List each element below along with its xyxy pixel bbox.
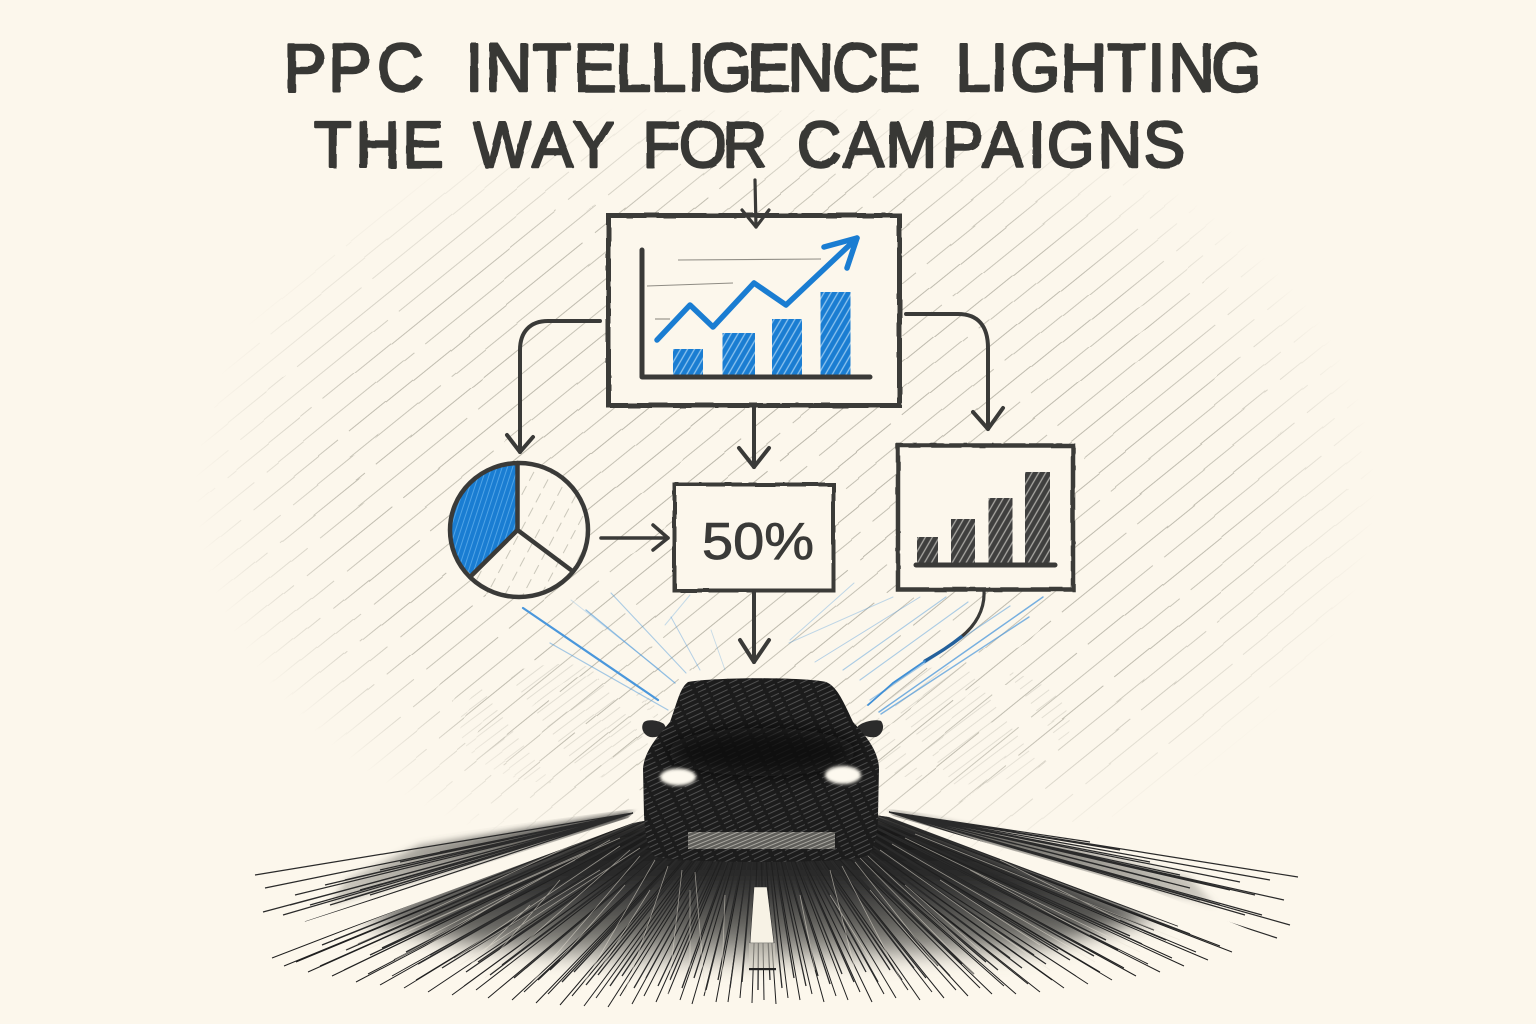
blue pie slice xyxy=(450,463,518,575)
icon: car front view xyxy=(642,678,883,862)
50% frame xyxy=(674,484,834,590)
lower lane marking xyxy=(749,943,776,970)
arrow: top into main chart xyxy=(742,180,769,227)
blue bars xyxy=(673,292,850,377)
road surface xyxy=(272,816,1232,1008)
arrow: pie to 50% box xyxy=(601,525,668,550)
pie light shading xyxy=(451,464,587,596)
title line 2: THE WAY FOR CAMPAIGNS xyxy=(314,110,1185,181)
panel: grey bar chart xyxy=(898,446,1073,590)
pie outline and dividers xyxy=(450,463,588,597)
right headlight xyxy=(825,766,861,784)
car dark centre xyxy=(667,728,857,776)
arrow: main chart to right panel xyxy=(906,314,1003,429)
left headlight xyxy=(660,768,696,786)
chart axes xyxy=(642,250,870,377)
road with radial pencil rays xyxy=(254,809,1298,1008)
car body shading xyxy=(643,678,879,862)
connector: grey panel to car beam xyxy=(868,591,984,705)
main chart frame xyxy=(608,216,900,406)
arrow: main chart to pie xyxy=(507,321,600,452)
panel: main growth chart xyxy=(608,216,900,406)
grey chart frame xyxy=(898,446,1073,590)
pie base xyxy=(450,463,588,597)
diagonal pencil hatching background xyxy=(180,110,1380,870)
arrow: main chart to 50% box xyxy=(739,405,769,467)
title line 1: PPC INTELLIGENCE LIGHTING xyxy=(283,31,1262,106)
left road shoulder xyxy=(255,812,633,922)
grey bars xyxy=(917,472,1050,565)
blue trend arrow xyxy=(657,238,857,340)
chart gridlines xyxy=(647,259,821,319)
blue headlight beams xyxy=(523,583,1043,714)
number plate xyxy=(688,832,835,849)
arrow: 50% box to car xyxy=(740,591,769,662)
grey chart baseline xyxy=(916,562,1055,568)
50% value: 50% xyxy=(702,513,814,571)
centre lane dash xyxy=(750,887,774,943)
title xyxy=(283,31,1262,181)
panel: 50% stat box xyxy=(674,484,834,590)
pie chart xyxy=(450,463,588,597)
car body xyxy=(643,678,879,862)
right road shoulder xyxy=(889,812,1298,938)
car mirrors xyxy=(642,720,883,737)
